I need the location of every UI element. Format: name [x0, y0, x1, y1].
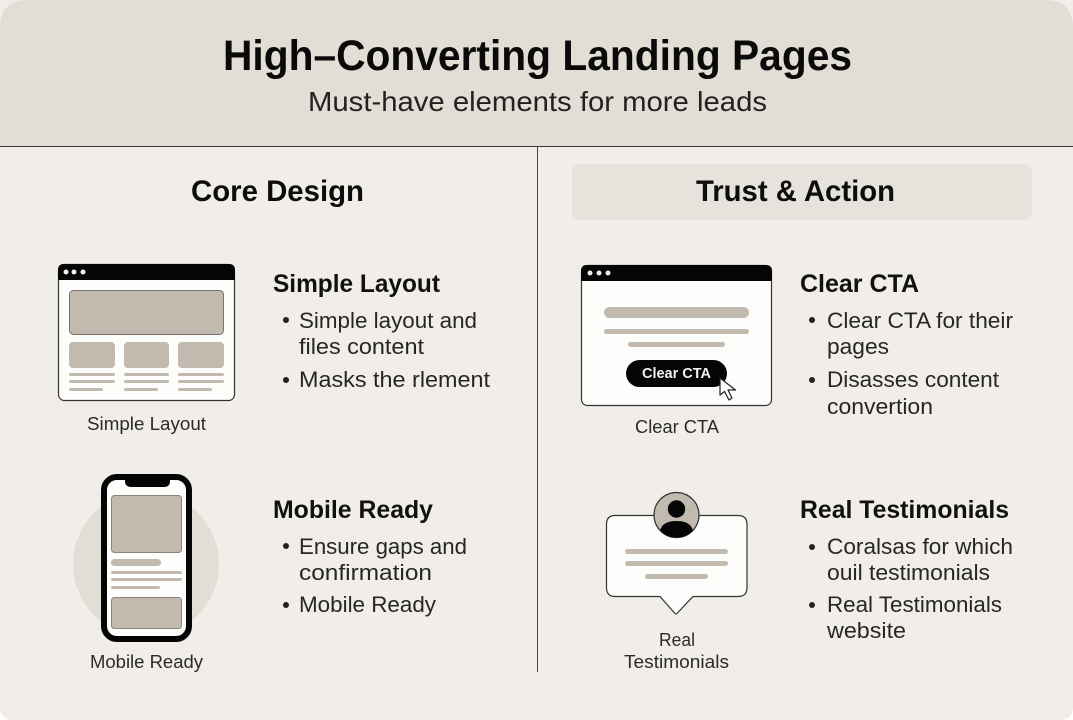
icon: browser wireframe [58, 264, 235, 400]
bullet list: Ensure gaps and [299, 534, 467, 559]
bullet list: Clear CTA for their [827, 308, 1013, 333]
bullet list: ouil testimonials [827, 560, 990, 585]
column divider [537, 147, 538, 672]
icon caption: Clear CTA [635, 417, 719, 437]
CTA button: Clear CTA [642, 366, 712, 382]
bullet list: convertion [827, 394, 933, 419]
item heading: Clear CTA [800, 270, 919, 298]
bullet list: confirmation [299, 560, 432, 585]
bullet list [283, 308, 490, 392]
bullet list: Simple layout and [299, 308, 477, 333]
bullet list [809, 308, 1013, 419]
heading: Trust & Action [572, 164, 1032, 220]
bullet list: website [826, 618, 906, 643]
icon: browser with CTA button [581, 265, 772, 406]
icon: smartphone wireframe [73, 477, 219, 639]
bullet list: Mobile Ready [299, 592, 436, 617]
title: High–Converting Landing Pages [223, 32, 852, 80]
icon caption: Simple Layout [87, 414, 206, 434]
panel: Simple Layout [58, 264, 490, 434]
icon caption [624, 630, 729, 672]
heading: Core Design: Core Design [191, 175, 364, 208]
bullet list: pages [827, 334, 889, 359]
bullet list: files content [299, 334, 424, 359]
item heading: Real Testimonials [800, 496, 1009, 524]
icon caption: Real [659, 630, 695, 650]
bullet list: Disasses content [827, 367, 999, 392]
subtitle: Must-have elements for more leads [308, 86, 767, 117]
item heading: Simple Layout [273, 270, 441, 298]
icon caption: Testimonials [624, 652, 729, 672]
bullet list: Masks the rlement [299, 367, 490, 392]
icon: cursor [720, 378, 736, 400]
CTA button [626, 360, 727, 387]
item heading: Mobile Ready [273, 496, 433, 524]
bullet list [809, 534, 1013, 643]
bullet list: Real Testimonials [827, 592, 1002, 617]
bullet list [283, 534, 467, 617]
bullet list: Coralsas for which [827, 534, 1013, 559]
icon: speech bubble with avatar [606, 492, 747, 614]
panel: Real Testimonials [606, 492, 1013, 672]
panel: Clear CTA [581, 265, 1013, 437]
heading: Trust & Action: Trust & Action [696, 175, 895, 208]
header band [0, 0, 1073, 147]
icon caption: Mobile Ready [90, 652, 203, 672]
panel: Mobile Ready [73, 477, 467, 672]
